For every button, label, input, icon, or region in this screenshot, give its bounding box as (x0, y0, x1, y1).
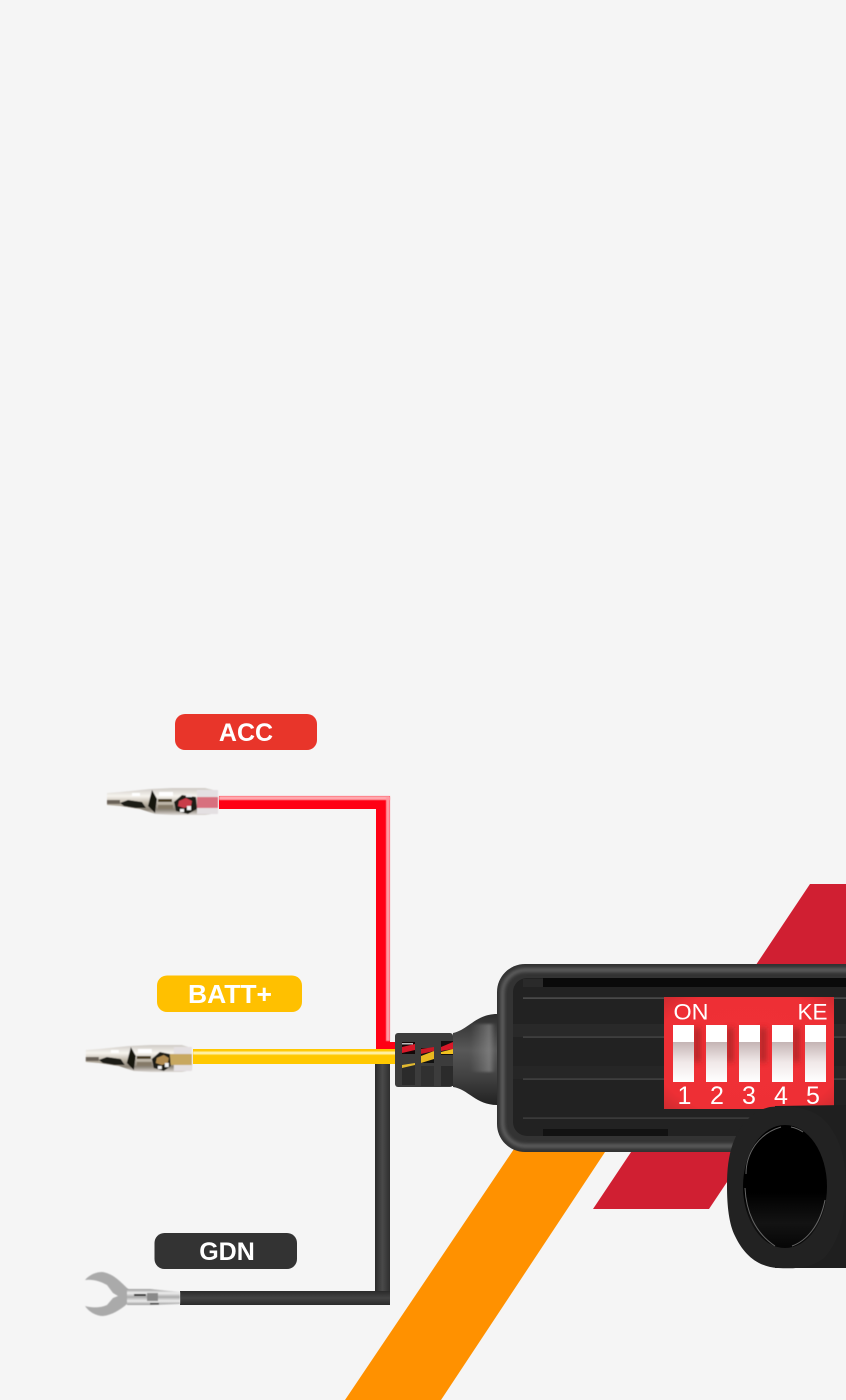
fork ground terminal (85, 1272, 180, 1316)
switch numbers: 4 (774, 1082, 788, 1110)
switch numbers: 3 (742, 1082, 756, 1110)
cable sleeve (395, 1033, 453, 1087)
socket opening (743, 1125, 827, 1248)
module face (513, 978, 846, 1136)
switch 4 (772, 1025, 793, 1082)
label: ON: ON (674, 1000, 708, 1024)
module shell (497, 964, 846, 1152)
red diagonal stripe (593, 884, 846, 1209)
control module body (497, 964, 846, 1152)
socket inner rim highlight (745, 1127, 825, 1246)
module bottom recess (543, 1129, 668, 1136)
black ground wire (180, 1062, 390, 1305)
switch numbers: 2 (710, 1082, 724, 1110)
DIP switch panel (664, 997, 834, 1110)
orange diagonal stripe (345, 1146, 609, 1400)
label: ACC (175, 714, 317, 750)
label: ACC: ACC (219, 719, 273, 747)
strain relief cone (453, 1014, 497, 1105)
red ACC wire (219, 796, 395, 1050)
power socket (727, 1105, 846, 1268)
label: KE: KE (798, 1000, 828, 1024)
switch shadows (694, 1028, 799, 1062)
switch 2 (706, 1025, 727, 1082)
BATT+ bullet terminal (86, 1045, 192, 1072)
socket collar (727, 1106, 846, 1268)
socket barrel (775, 1105, 846, 1268)
label: BATT+: BATT+ (188, 981, 272, 1009)
switch 5 (805, 1025, 826, 1082)
switch 3 (739, 1025, 760, 1082)
label: GDN (154, 1233, 297, 1269)
label: BATT+ (157, 976, 302, 1012)
cable strain relief (395, 1014, 497, 1105)
ACC bullet terminal (107, 788, 218, 815)
switch 1 (673, 1025, 694, 1082)
switch numbers: 1 (678, 1082, 691, 1110)
switch numbers: 5 (806, 1082, 820, 1110)
yellow BATT+ wire (193, 1049, 396, 1064)
module top recess (543, 978, 846, 987)
switch numbers (678, 1082, 820, 1110)
label: GDN: GDN (199, 1238, 255, 1266)
